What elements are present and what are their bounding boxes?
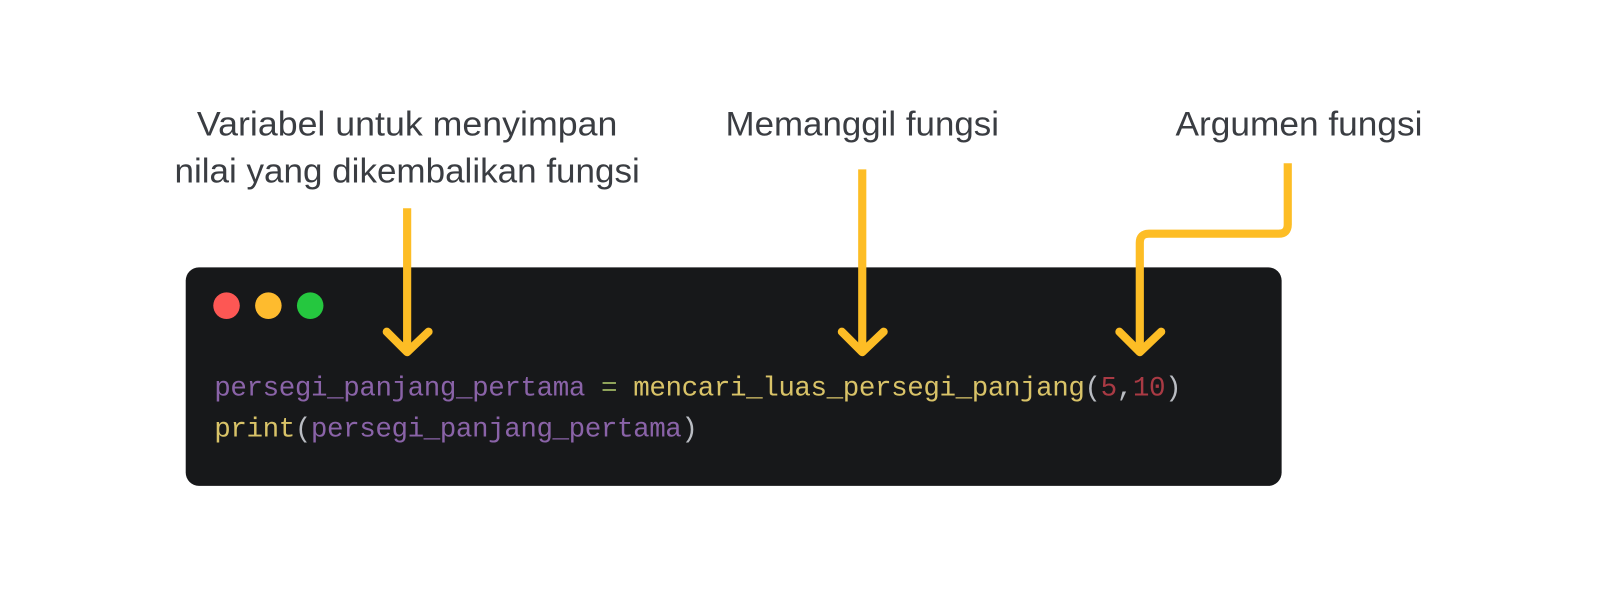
code text: print(persegi_panjang_pertama)	[214, 414, 698, 445]
code text: persegi_panjang_pertama = mencari_luas_persegi_panjang(5,10)	[214, 374, 1182, 405]
window buttons	[213, 292, 323, 319]
arrow: to function call	[842, 169, 884, 352]
code text	[214, 374, 1182, 445]
arrow: to function argument	[1119, 163, 1288, 352]
label: variable: Variabel untuk menyimpan	[197, 106, 617, 144]
panel: code window	[186, 267, 1282, 486]
label: function argument: Argumen fungsi	[1176, 106, 1422, 144]
arrow: to variable	[387, 208, 429, 352]
label: call function: Memanggil fungsi	[726, 106, 999, 144]
label: variable	[174, 106, 640, 191]
label: variable: nilai yang dikembalikan fungsi	[174, 153, 640, 191]
